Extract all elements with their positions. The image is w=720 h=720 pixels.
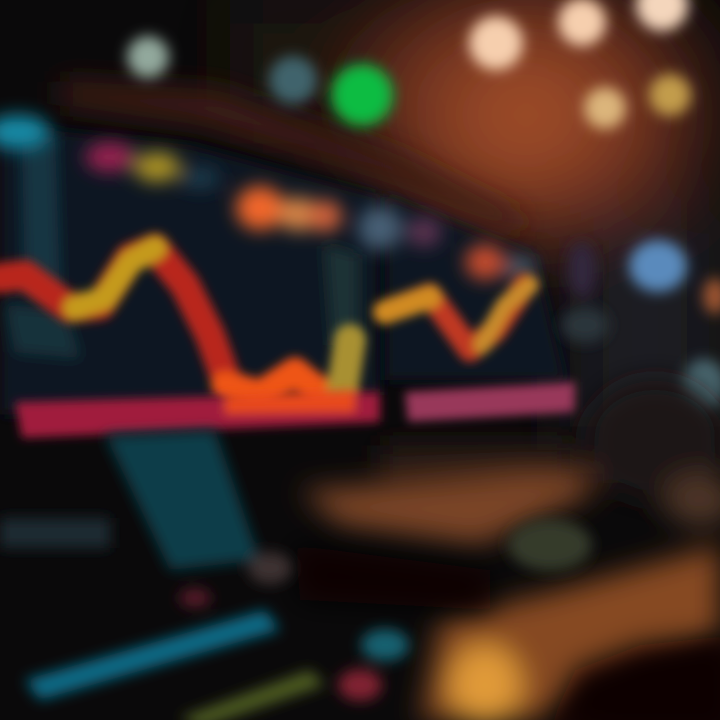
- beam above the screens: [60, 80, 520, 235]
- screen labels: [0, 115, 535, 281]
- background glow: warm light top right: [230, 0, 720, 450]
- lights: bokeh: [127, 0, 720, 411]
- teal shapes: lower left: [0, 430, 592, 720]
- bars: bottom of screens: [15, 382, 575, 438]
- line chart: left screen: [0, 248, 350, 398]
- panel: right screen: [385, 195, 565, 380]
- shadow: dark object bottom right: [295, 545, 720, 720]
- line chart: right screen: [385, 285, 530, 350]
- panel: left screen: [0, 125, 380, 415]
- desk: warm surfaces: [300, 380, 720, 720]
